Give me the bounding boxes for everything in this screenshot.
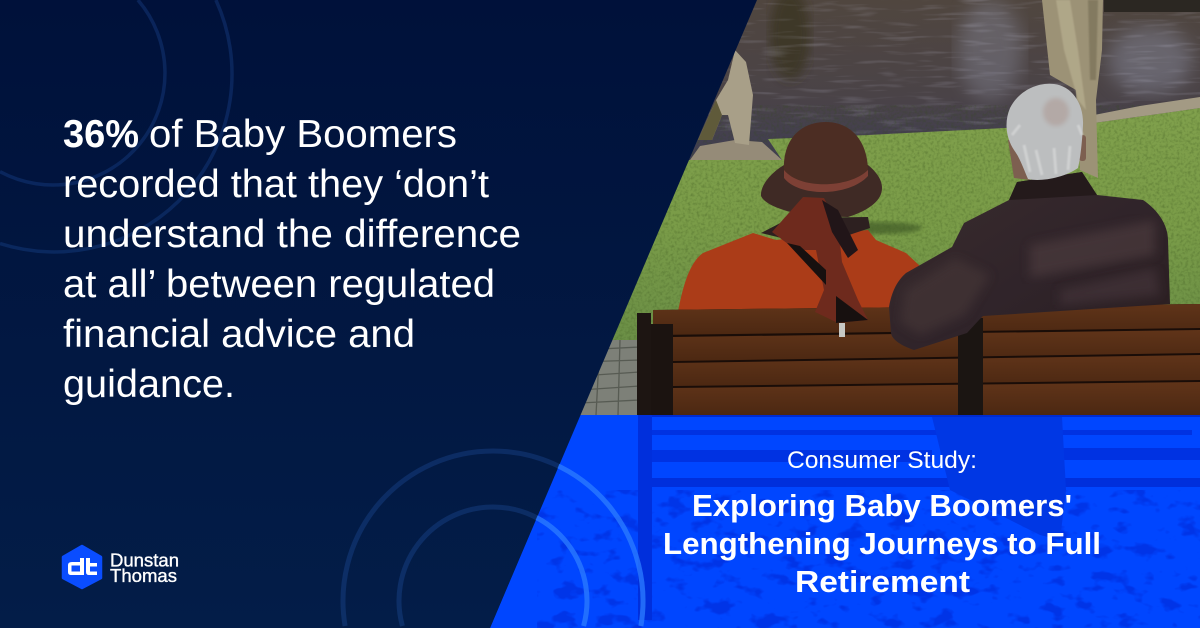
bench posts (637, 313, 983, 415)
logo wordmark: Thomas (110, 566, 177, 586)
man's jacket (889, 172, 1170, 350)
main statistic text: understand the difference (63, 213, 521, 256)
main statistic text: at all’ between regulated (63, 263, 495, 306)
cobblestones (580, 340, 640, 416)
panel: blue study banner (490, 415, 1200, 628)
far path (1094, 97, 1200, 123)
panel: navy slanted background (0, 0, 757, 628)
park bench (637, 304, 1200, 415)
study subheading: Consumer Study: (787, 447, 977, 474)
man's hair and neck (1007, 84, 1086, 180)
study title (663, 488, 1101, 599)
logo: Dunstan Thomas (63, 546, 179, 588)
logo wordmark: Dunstan (110, 550, 179, 570)
study title: Lengthening Journeys to Full (663, 526, 1101, 561)
main statistic text: guidance. (63, 363, 235, 406)
photo: elderly couple on a park bench (580, 0, 1200, 416)
study title: Retirement (795, 564, 970, 599)
decorative rings: top left (0, 0, 232, 252)
pavement and bench texture (537, 415, 1200, 628)
water (580, 0, 1200, 160)
tree trunk (1042, 0, 1103, 178)
main statistic text: recorded that they ‘don’t (63, 163, 489, 206)
main statistic text: 36% (63, 113, 139, 156)
decorative rings: bottom centre (343, 451, 643, 626)
grass lawn (580, 105, 1200, 340)
woman's hat (761, 122, 882, 217)
study title: Exploring Baby Boomers' (692, 488, 1072, 523)
rings over blue banner (536, 464, 646, 626)
woman's scarf (761, 197, 870, 323)
woman's coat (678, 230, 921, 312)
main statistic text: of Baby Boomers (149, 113, 457, 156)
main statistic text (63, 113, 521, 406)
statue on plinth (690, 50, 782, 160)
logo wordmark (110, 550, 179, 586)
main statistic text: financial advice and (63, 313, 415, 356)
icon: hexagon dt mark (63, 546, 101, 588)
